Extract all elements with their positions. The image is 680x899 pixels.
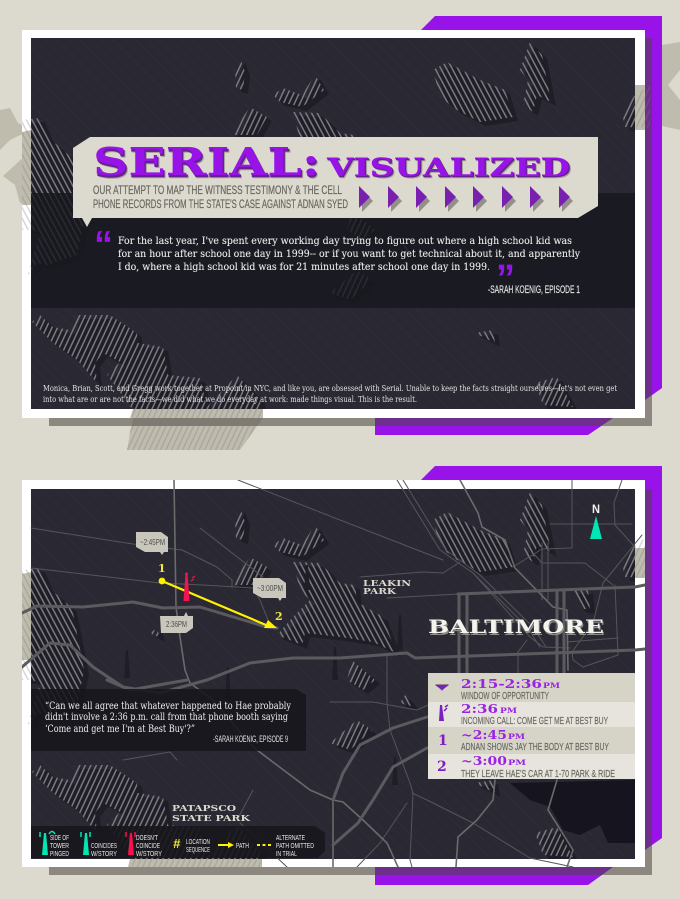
legend: location sequence [173, 836, 210, 854]
legend: alternate path [257, 833, 314, 858]
water [510, 780, 635, 843]
faint hatching beyond the panel [22, 42, 650, 450]
legend: location sequence: # [173, 836, 181, 851]
quote box: Sarah Koenig episode 9: ‘Come and get me I'm at Best Buy'?” [45, 724, 195, 735]
row: window of opportunity [428, 673, 635, 702]
dim towers [124, 565, 403, 785]
quote: Sarah Koenig: For the last year, I've spent every working day trying to figure out where a high school kid was [118, 235, 572, 247]
drop shadow [49, 38, 652, 426]
place label: Baltimore [428, 616, 605, 640]
legend: side of tower pinged: TOWER [50, 841, 69, 850]
place label: Baltimore: BALTIMORE [429, 618, 605, 640]
title: Serial: SERIAL: [95, 142, 322, 187]
map silhouettes on paper [0, 42, 680, 450]
quote box: Sarah Koenig episode 9: -SARAH KOENIG, EPISODE 9 [213, 734, 288, 744]
legend: path: PATH [236, 841, 249, 850]
legend: doesn't coincide [126, 832, 162, 858]
legend: path [218, 841, 249, 850]
row: incoming call [428, 702, 635, 727]
row: leave car: 2 [437, 759, 447, 775]
attribution: -SARAH KOENIG, EPISODE 1 [488, 284, 580, 296]
legend: side of tower pinged: SIDE OF [50, 833, 69, 842]
legend: coincides: W/STORY [91, 849, 117, 858]
quote box: Sarah Koenig episode 9: “Can we all agree that whatever happened to Hae probably [45, 701, 291, 712]
quote: Sarah Koenig: for an hour after school one day in 1999-- or if you want to get technical about it, and apparently [118, 248, 580, 260]
title banner [73, 137, 598, 227]
place label: Baltimore: BALTIMORE [428, 616, 604, 638]
drop shadow [49, 489, 652, 875]
path arrow [159, 578, 277, 628]
legend: alternate path: ALTERNATE [276, 833, 305, 842]
quote box: Sarah Koenig episode 9: didn't involve a 2:36 p.m. call from that phone booth saying [45, 712, 288, 723]
quote box: Sarah Koenig episode 9 [31, 689, 306, 751]
row: incoming call: 2:36 [461, 702, 498, 716]
title: Serial: VISUALIZED [328, 155, 572, 184]
legend: coincides [81, 832, 117, 858]
legend: coincides: COINCIDES [91, 841, 117, 850]
purple offset frame [375, 466, 662, 885]
label 2: 2 [275, 610, 283, 623]
legend: location sequence: LOCATION [186, 837, 210, 846]
row: window of opportunity: PM [543, 681, 560, 690]
dark band behind quote [31, 193, 635, 308]
road network [22, 480, 645, 867]
legend: alternate path: PATH OMITTED [276, 841, 314, 850]
dark map panel [31, 489, 635, 859]
opening quote mark: “ [94, 224, 113, 266]
subtitle: OUR ATTEMPT TO MAP THE WITNESS TESTIMONY & THE CELL [93, 183, 342, 197]
legend: doesn't coincide: DOESN'T [136, 833, 158, 842]
icon: north arrow [590, 502, 602, 539]
row: adnan shows jay: ~2:45 [461, 728, 507, 742]
panel: intro [0, 16, 680, 454]
row: window of opportunity: 2:15-2:36 [461, 677, 542, 691]
legend: side of tower pinged: PINGED [50, 849, 69, 858]
place label: Leakin Park: PARK [363, 586, 397, 596]
row: incoming call: PM [500, 706, 517, 715]
callout: 3:00: ~3:00PM [257, 583, 283, 593]
row: adnan shows jay: PM [508, 732, 525, 741]
map blob shadows [31, 496, 635, 859]
legend: side of tower pinged [40, 832, 69, 858]
map hatching [31, 492, 635, 859]
subtitle: PHONE RECORDS FROM THE STATE'S CASE AGAINST ADNAN SYED [93, 197, 348, 211]
icon: north arrow: N [592, 502, 600, 516]
callout: 2:36 [160, 612, 193, 633]
icon: red tower [184, 572, 195, 601]
purple offset frame [375, 16, 662, 435]
callout: 2:45: ~2:45PM [140, 537, 165, 547]
legend: alternate path: IN TRIAL [276, 849, 297, 858]
legend: location sequence: SEQUENCE [186, 845, 210, 854]
row: leave car: ~3:00 [461, 754, 507, 768]
callout: 3:00 [253, 578, 286, 601]
row: adnan shows jay [428, 727, 635, 754]
callout: 2:45 [136, 532, 168, 555]
title: Serial: SERIAL: [94, 141, 321, 186]
title: Serial [93, 139, 572, 187]
place label: Leakin Park: LEAKIN [363, 578, 411, 588]
legend: doesn't coincide: W/STORY [136, 849, 162, 858]
row: window of opportunity: WINDOW OF OPPORTUNITY [461, 690, 549, 702]
white frame [22, 480, 645, 867]
map blob shadows [31, 46, 635, 409]
row: leave car [428, 754, 635, 780]
white frame [22, 30, 645, 418]
panel: map [22, 466, 662, 899]
timeline key panel [428, 673, 635, 780]
title: Serial: VISUALIZED [326, 153, 570, 182]
legend [31, 826, 325, 858]
place label: Patapsco State Park: PATAPSCO [172, 804, 237, 814]
place label: Leakin Park [363, 578, 411, 596]
legend: doesn't coincide: COINCIDE [136, 841, 160, 850]
subtitle [93, 183, 348, 211]
faint hatching on the frame [22, 539, 645, 867]
place label: Patapsco State Park [172, 804, 251, 824]
quote: Sarah Koenig: I do, where a high school kid was for 21 minutes after school one day in 1999. [118, 261, 490, 273]
closing quote mark: ” [496, 258, 515, 300]
label 1: 1 [158, 562, 166, 575]
place label: Patapsco State Park: STATE PARK [172, 814, 251, 824]
row: adnan shows jay: 1 [438, 733, 448, 749]
callout: 2:36: 2:36PM [166, 619, 187, 629]
map hatching [31, 42, 635, 409]
dark map panel [31, 38, 635, 409]
row: leave car: PM [508, 758, 526, 767]
quote: Sarah Koenig [94, 224, 580, 300]
title: Serial: VISUALIZED [327, 154, 571, 183]
credits text: into what are or are not the facts—we did what we do everyday at work: made things visual. This is the result. [43, 395, 417, 404]
title: Serial: SERIAL: [93, 139, 320, 184]
credits text [43, 384, 618, 404]
row of arrows [359, 186, 573, 212]
